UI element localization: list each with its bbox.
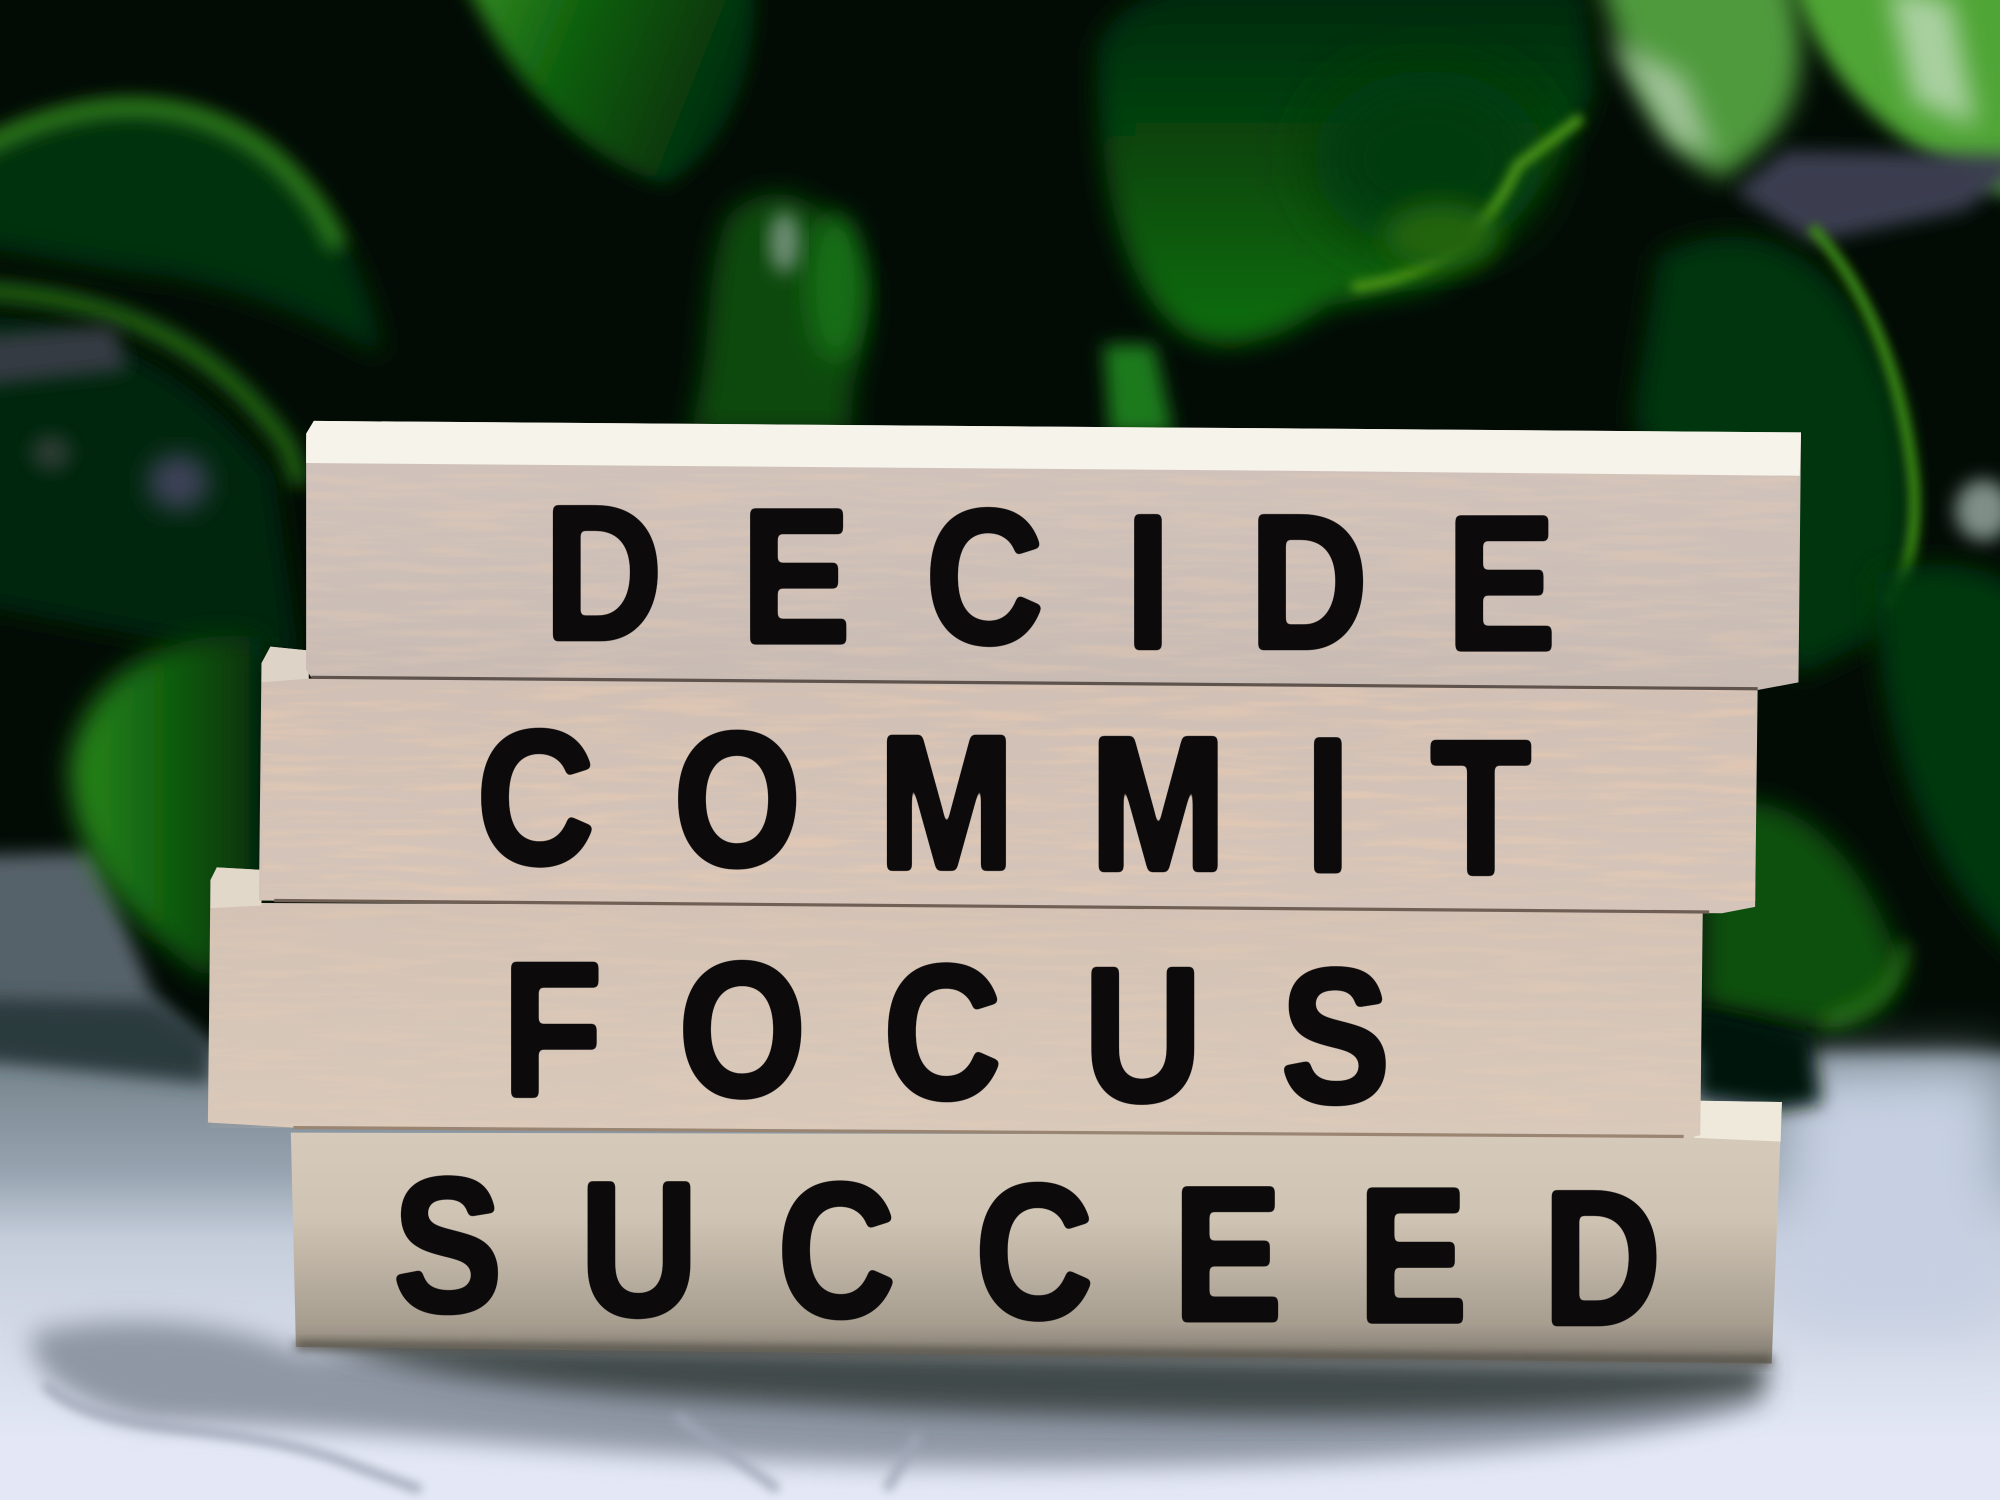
leaf: right lower leaves — [1703, 564, 2000, 1028]
block 1 wood grain — [307, 474, 1797, 676]
word: FOCUS: FOCUS — [502, 922, 1390, 1143]
word: COMMIT: COMMIT — [476, 690, 1531, 914]
leaf: middle stem leaves — [689, 194, 1173, 434]
block 3: FOCUS — [208, 867, 1703, 1143]
word: SUCCEED: SUCCEED — [393, 1138, 1661, 1365]
shadow: contact shadow beneath the bottom block — [306, 1339, 1770, 1417]
block 3 wood grain — [210, 908, 1700, 1128]
block 4 bottom shadow line — [296, 1342, 1772, 1365]
block 2 top left highlight — [261, 647, 309, 682]
leaf: left lower leaf — [70, 636, 261, 982]
leaf: top right bright leaves — [1594, 0, 2000, 217]
leaf: top centre leaf — [457, 0, 755, 185]
leaf: centre right large leaf — [1097, 0, 1594, 343]
foliage: blurred green leaves — [0, 0, 2000, 1028]
background: grey table patches seen through leaves — [0, 151, 2000, 541]
leaf: left large curled leaf — [0, 108, 383, 663]
block 3 base line — [293, 1128, 1684, 1136]
block 2 base line — [274, 901, 1709, 912]
block 4 top highlight — [1694, 1101, 1782, 1142]
wooden block stack — [208, 421, 1801, 1365]
leaf: right large leaf with bright rim — [1633, 227, 1914, 676]
marble veins — [45, 1384, 918, 1490]
background: grey table seen at far left — [0, 852, 217, 1059]
block 1 top face — [306, 421, 1801, 476]
block 4: SUCCEED — [291, 1101, 1782, 1365]
block 1: DECIDE — [306, 421, 1801, 690]
block 1 base line — [311, 677, 1758, 689]
shadow: soft shadow beneath the bottom block — [31, 1321, 1773, 1467]
highlight: right table surface — [1786, 1065, 2000, 1327]
word: DECIDE: DECIDE — [544, 465, 1556, 690]
block 3 top left highlight — [210, 867, 261, 908]
block 2 wood grain — [263, 686, 1755, 901]
marble table surface — [0, 997, 2000, 1500]
shadow: dark area right of the stack — [1696, 1008, 1821, 1110]
block 2: COMMIT — [259, 647, 1758, 914]
shadow: dark band behind blocks on the left — [0, 997, 210, 1084]
